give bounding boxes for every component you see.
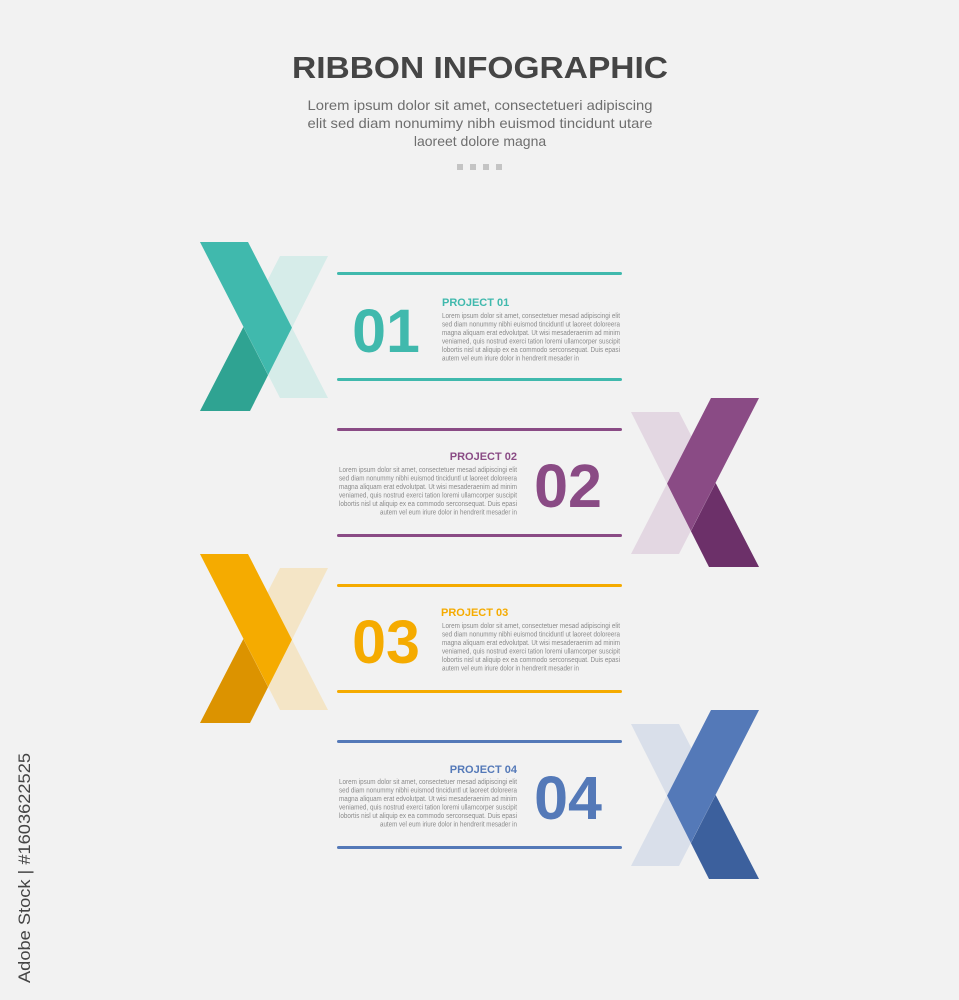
text block 04: lobortis nisl ut aliquip ex ea commodo serconsequat. Duis epasi (339, 813, 517, 820)
subtitle: laoreet dolore magna (414, 133, 546, 149)
icon: ribbon 03 (200, 554, 328, 723)
text block 04: Lorem ipsum dolor sit amet, consectetuer mesad adipiscingi elit (339, 779, 517, 786)
step 04 (337, 710, 759, 879)
text block 02: sed diam nonummy nibhi euismod tinciduntl ut laoreet doloreera (339, 476, 517, 482)
text block 02: autem vel eum iriure dolor in hendrerit mesader in (380, 510, 517, 516)
step 03 (200, 554, 622, 723)
heading: project 02: PROJECT 02 (450, 451, 517, 463)
subtitle: elit sed diam nonumimy nibh euismod tincidunt utare (308, 115, 653, 131)
text block 04 (339, 779, 517, 828)
text block 02: Lorem ipsum dolor sit amet, consectetuer mesad adipiscingi elit (339, 467, 517, 474)
text block 04: veniamed, quis nostrud exerci tation loremi ullamcorper suscipit (339, 804, 517, 812)
subtitle: Lorem ipsum dolor sit amet, consectetueri adipiscing (308, 97, 652, 113)
icon: ribbon 04 (631, 710, 759, 879)
text block 01: Lorem ipsum dolor sit amet, consectetuer mesad adipiscingi elit (442, 313, 620, 320)
text block 01 (442, 313, 620, 362)
number 03: 03 (352, 608, 420, 676)
text block 01: lobortis nisl ut aliquip ex ea commodo serconsequat. Duis epasi (442, 347, 620, 354)
text block 03: lobortis nisl ut aliquip ex ea commodo serconsequat. Duis epasi (442, 657, 620, 664)
icon: ribbon 02 (631, 398, 759, 567)
text block 04: magna aliquam erat edvolutpat. Ut wisi mesaderaenim ad minim (339, 796, 517, 803)
text block 02 (339, 467, 517, 516)
text block 01: autem vel eum iriure dolor in hendrerit mesader in (442, 356, 579, 362)
heading: project 01: PROJECT 01 (442, 297, 509, 309)
text block 01: veniamed, quis nostrud exerci tation loremi ullamcorper suscipit (442, 338, 620, 346)
number 02: 02 (534, 452, 602, 520)
step 01 (200, 242, 622, 411)
text block 01: sed diam nonummy nibhi euismod tinciduntl ut laoreet doloreera (442, 322, 620, 328)
number 04: 04 (534, 764, 602, 832)
subtitle (308, 97, 653, 149)
text block 02: veniamed, quis nostrud exerci tation loremi ullamcorper suscipit (339, 492, 517, 500)
text block 03 (442, 623, 620, 672)
step 02 (337, 398, 759, 567)
text block 04: autem vel eum iriure dolor in hendrerit mesader in (380, 822, 517, 828)
icon: ribbon 01 (200, 242, 328, 411)
text block 03: sed diam nonummy nibhi euismod tinciduntl ut laoreet doloreera (442, 632, 620, 638)
text block 04: sed diam nonummy nibhi euismod tinciduntl ut laoreet doloreera (339, 788, 517, 794)
text block 03: magna aliquam erat edvolutpat. Ut wisi mesaderaenim ad minim (442, 640, 620, 647)
number 01: 01 (352, 297, 420, 365)
text block 03: veniamed, quis nostrud exerci tation loremi ullamcorper suscipit (442, 648, 620, 656)
text block 02: lobortis nisl ut aliquip ex ea commodo serconsequat. Duis epasi (339, 501, 517, 508)
text block 03: autem vel eum iriure dolor in hendrerit mesader in (442, 666, 579, 672)
title: RIBBON INFOGRAPHIC (292, 50, 668, 85)
heading: project 03: PROJECT 03 (441, 607, 508, 619)
text block 03: Lorem ipsum dolor sit amet, consectetuer mesad adipiscingi elit (442, 623, 620, 630)
watermark text: Adobe Stock | #1603622525 (15, 753, 34, 983)
dots (457, 164, 502, 170)
text block 02: magna aliquam erat edvolutpat. Ut wisi mesaderaenim ad minim (339, 484, 517, 491)
text block 01: magna aliquam erat edvolutpat. Ut wisi mesaderaenim ad minim (442, 330, 620, 337)
heading: project 04: PROJECT 04 (450, 764, 518, 776)
